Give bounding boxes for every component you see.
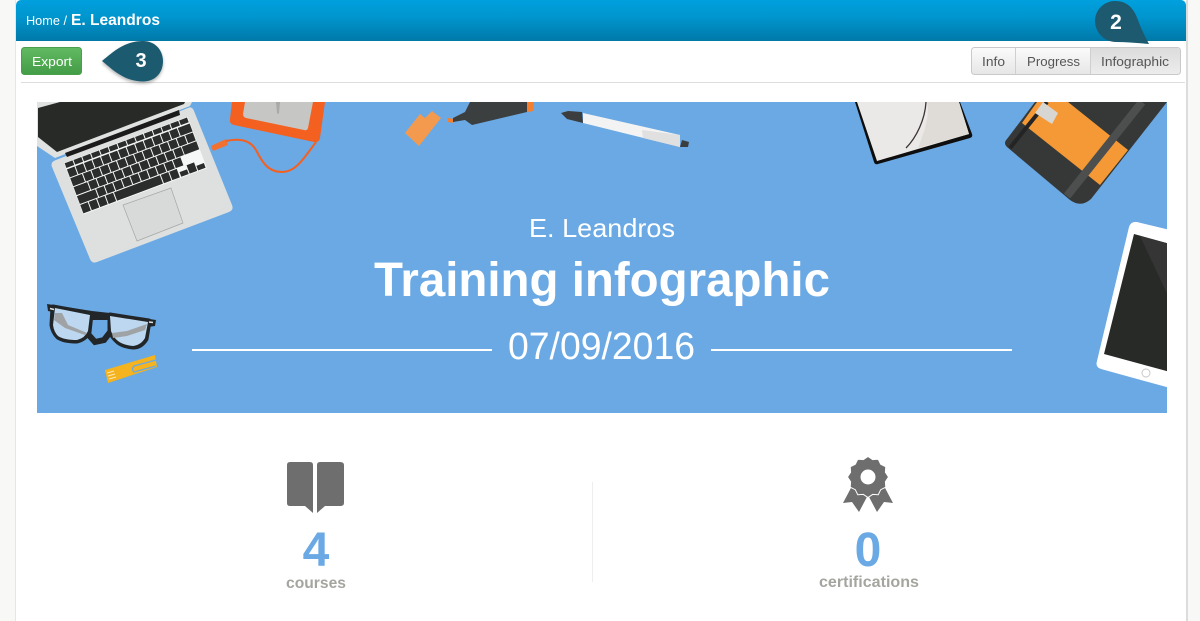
icon: dark notebook with orange band — [1005, 102, 1167, 204]
button: Export: Export — [32, 54, 72, 69]
tabs: Info, Progress, Infographic: Infographic — [1101, 54, 1170, 69]
banner title: Training infographic: Training infographic — [374, 254, 830, 307]
header bar with breadcrumb: Home / — [26, 13, 67, 28]
callout 3 — [102, 41, 163, 82]
label: certifications: certifications — [819, 574, 919, 591]
panel: certifications stat — [819, 456, 919, 591]
banner title: name: E. Leandros — [529, 213, 675, 243]
icon: glasses — [47, 304, 156, 347]
toolbar divider — [21, 82, 1185, 83]
callout 2 — [1095, 1, 1149, 44]
callout 3: 3 — [135, 50, 147, 72]
callout 2: 2 — [1110, 11, 1122, 34]
icon: tablet — [1096, 222, 1170, 388]
label: courses: courses — [286, 575, 346, 592]
banner date with rules: 07/09/2016 — [508, 326, 695, 368]
icon: orange hard drive and cable — [211, 102, 325, 172]
icon: pen — [561, 111, 689, 147]
icon: white notebook — [855, 102, 972, 164]
number: 4 courses: 4 — [303, 524, 330, 577]
number: 0 certifications: 0 — [855, 524, 881, 577]
tabs: Info, Progress, Infographic: Info — [982, 54, 1005, 69]
header bar with breadcrumb: E. Leandros — [71, 12, 160, 29]
tabs: Info, Progress, Infographic — [972, 48, 1180, 74]
panel: courses stat — [286, 462, 346, 592]
button: Export — [22, 48, 82, 74]
icon: marker cap — [405, 111, 441, 146]
divider — [592, 482, 593, 582]
tabs: Info, Progress, Infographic: Progress — [1027, 54, 1080, 69]
icon: award badge — [843, 456, 893, 512]
icon: USB clip — [105, 355, 157, 383]
header bar with breadcrumb — [16, 0, 1186, 41]
panel: banner — [37, 102, 1170, 413]
icon: highlighter marker — [448, 102, 534, 125]
icon: laptop — [37, 102, 233, 263]
icon: book — [287, 462, 344, 513]
